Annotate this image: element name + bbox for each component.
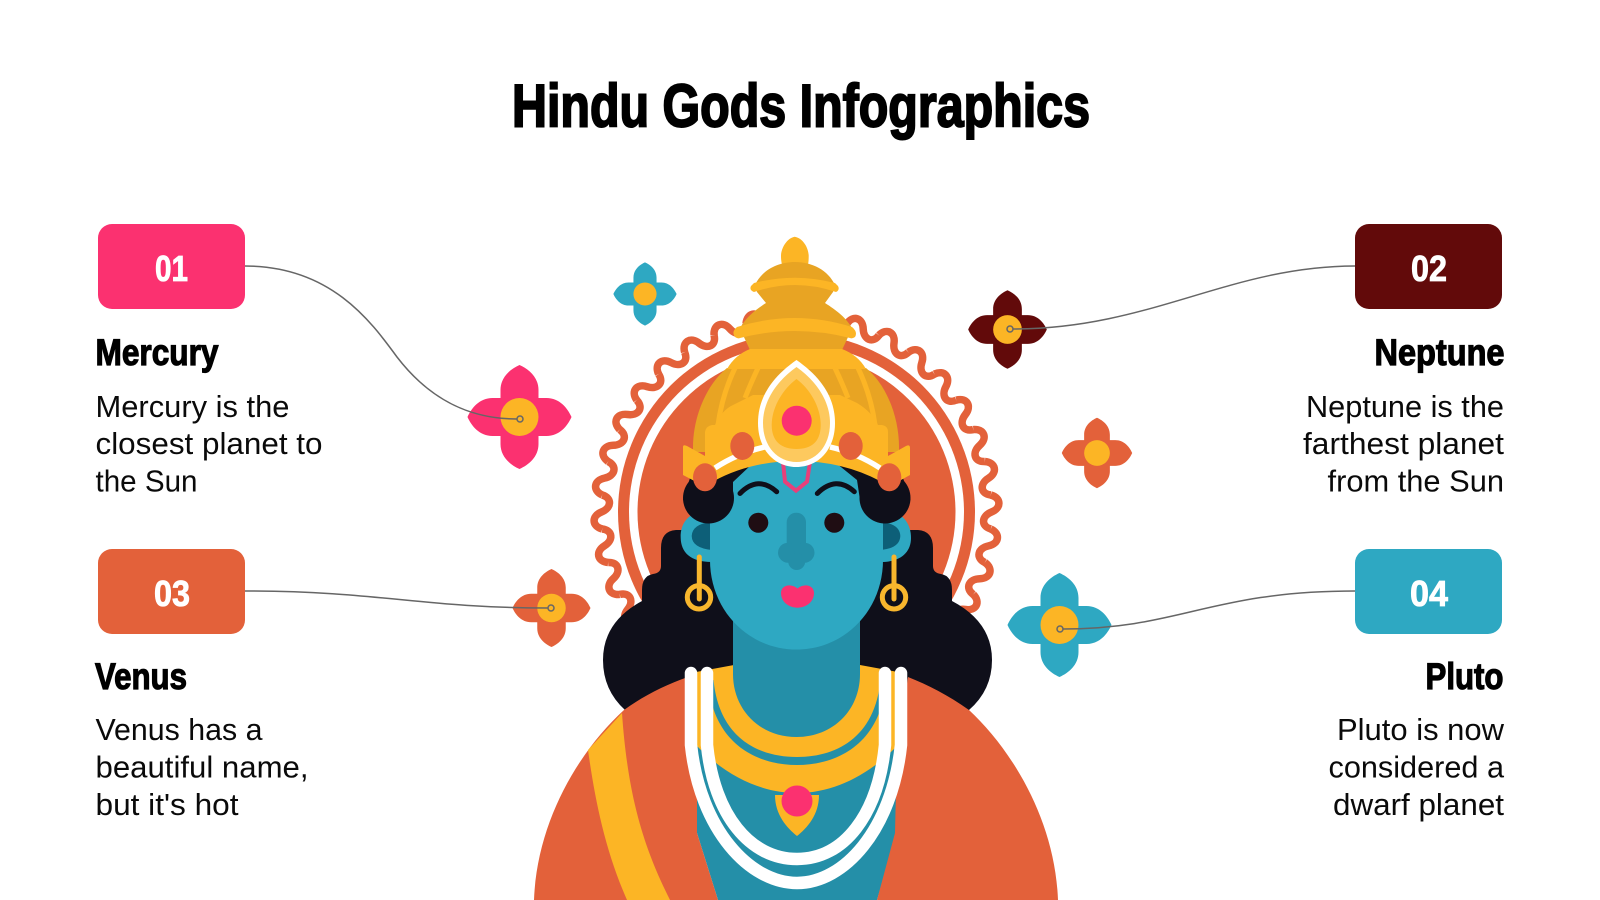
number badge 04 — [1355, 549, 1502, 634]
description Neptune — [1303, 389, 1504, 498]
pendant — [775, 786, 819, 836]
title: Hindu Gods Infographics — [512, 73, 1090, 140]
hair — [603, 530, 992, 710]
description Pluto: dwarf planet — [1333, 787, 1504, 822]
lips — [781, 585, 814, 608]
crown gem — [758, 360, 835, 467]
description Venus: Venus has a — [96, 712, 263, 747]
white bead strands — [691, 673, 901, 883]
panel: 04 Pluto — [1328, 549, 1505, 822]
number badge 04: 04 — [1410, 573, 1448, 614]
eyebrows — [740, 484, 854, 494]
number badge 02 — [1355, 224, 1502, 309]
description Neptune: from the Sun — [1328, 464, 1504, 498]
face — [710, 455, 883, 650]
panel: 03 Venus — [95, 549, 308, 822]
neck — [733, 620, 860, 737]
description Pluto — [1328, 712, 1505, 822]
description Mercury — [96, 389, 322, 498]
ears — [681, 510, 911, 562]
robe and chest — [534, 677, 1058, 900]
central figure: Hindu god — [534, 237, 1058, 900]
heading Neptune: Neptune — [1374, 332, 1504, 373]
tilak — [783, 462, 810, 491]
panel: 01 Mercury — [96, 224, 322, 498]
eyes — [748, 513, 844, 533]
description Pluto: Pluto is now — [1337, 712, 1505, 747]
decorative flower: small orange — [1062, 418, 1132, 488]
connector: 03 to orange flower — [245, 591, 554, 611]
description Venus: beautiful name, — [96, 750, 308, 784]
heading Mercury: Mercury — [96, 332, 219, 373]
description Mercury: the Sun — [96, 464, 198, 498]
description Pluto: considered a — [1328, 750, 1505, 784]
number badge 01 — [98, 224, 245, 309]
nose — [778, 513, 814, 570]
flower marker: teal — [1008, 573, 1112, 677]
number badge 03 — [98, 549, 245, 634]
panel: 02 Neptune — [1303, 224, 1504, 498]
earrings — [687, 557, 906, 609]
flower marker: dark red — [968, 290, 1047, 369]
heading Venus: Venus — [95, 656, 187, 697]
flower marker: orange — [512, 569, 590, 647]
number badge 03: 03 — [154, 573, 190, 614]
gold necklaces — [696, 665, 898, 793]
connector: 01 to pink flower — [245, 266, 523, 422]
description Mercury: closest planet to — [96, 426, 322, 461]
number badge 02: 02 — [1411, 248, 1447, 289]
halo — [594, 310, 999, 690]
heading Pluto: Pluto — [1426, 656, 1504, 697]
connector: 02 to dark red flower — [1007, 266, 1355, 332]
connector: 04 to teal flower — [1057, 591, 1355, 632]
description Venus — [96, 712, 308, 822]
hair curls — [683, 463, 910, 524]
description Neptune: farthest planet — [1303, 426, 1504, 461]
description Neptune: Neptune is the — [1306, 389, 1504, 424]
flower marker: pink — [468, 365, 572, 469]
crown — [683, 237, 910, 491]
description Mercury: Mercury is the — [96, 389, 290, 424]
number badge 01: 01 — [155, 248, 188, 289]
decorative flower: small teal — [613, 262, 677, 326]
description Venus: but it's hot — [96, 787, 239, 822]
